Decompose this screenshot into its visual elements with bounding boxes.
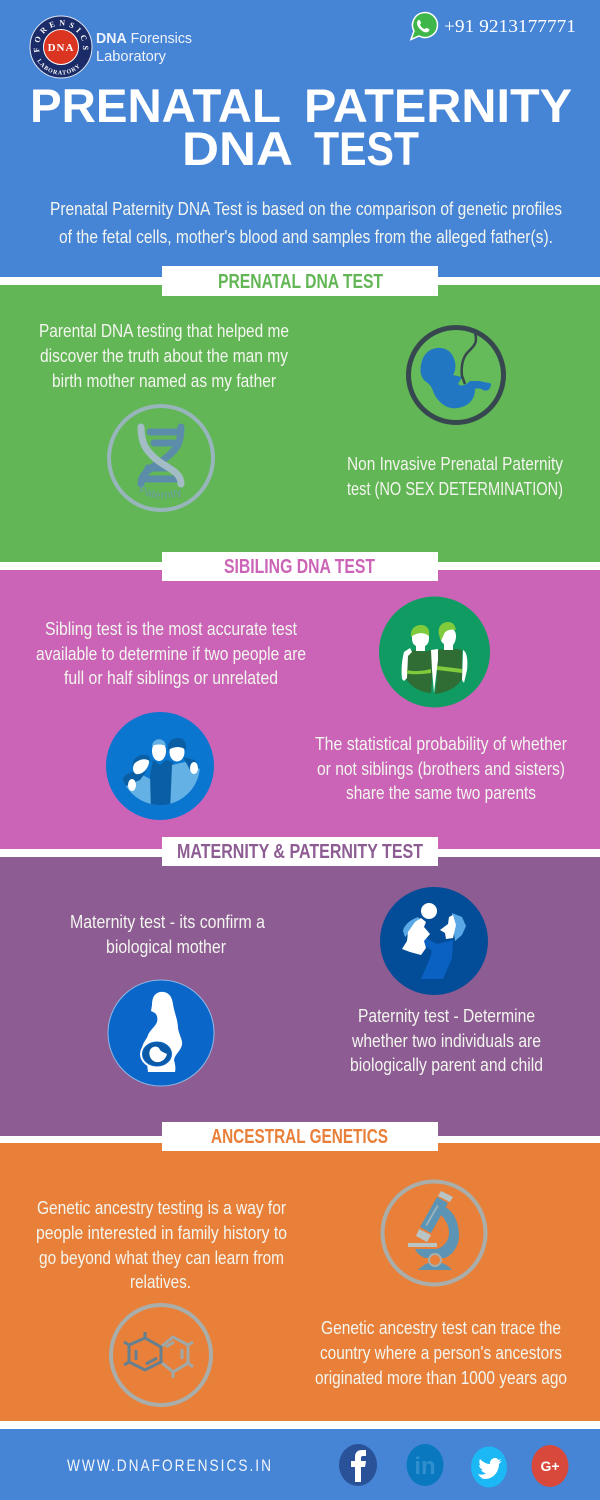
website: WWW.DNAFORENSICS.IN bbox=[67, 1456, 273, 1475]
panel: header bbox=[0, 0, 600, 277]
icon: DNA paternity: Paternity bbox=[138, 486, 180, 498]
icon: whatsapp bbox=[411, 13, 437, 40]
text: genetic ancestry testing: go beyond what they can learn from bbox=[39, 1248, 284, 1268]
text: non invasive test: Non Invasive Prenatal Paternity bbox=[347, 454, 563, 474]
icon: linkedin: in bbox=[414, 1453, 436, 1480]
panel: ancestral genetics bbox=[0, 1122, 600, 1421]
text: statistical probability: or not siblings (brothers and sisters) bbox=[317, 759, 565, 779]
heading: ancestral genetics bbox=[162, 1122, 438, 1151]
panel: maternity and paternity test bbox=[0, 837, 600, 1136]
panel: sibling DNA test bbox=[0, 552, 600, 849]
text: genetic ancestry testing: Genetic ancestry testing is a way for bbox=[37, 1198, 286, 1218]
icon: facebook bbox=[339, 1444, 377, 1486]
icon: family bbox=[106, 712, 214, 820]
icon: laboratory logo: LABORATORY bbox=[37, 58, 80, 75]
logo text bbox=[96, 30, 192, 65]
title: TEST bbox=[314, 122, 419, 175]
title: PATERNITY bbox=[304, 79, 572, 132]
text: paternity test: biologically parent and child bbox=[350, 1055, 543, 1075]
text: genetic ancestry test: Genetic ancestry test can trace the bbox=[321, 1318, 561, 1338]
intro text bbox=[50, 199, 562, 247]
icon: siblings bbox=[379, 596, 490, 708]
text: statistical probability: share the same two parents bbox=[346, 783, 536, 803]
icon: twitter bbox=[471, 1446, 507, 1488]
heading: sibling DNA test bbox=[162, 552, 438, 581]
heading: maternity and paternity test: MATERNITY & PATERNITY TEST bbox=[177, 840, 423, 863]
title: PRENATAL bbox=[30, 79, 281, 132]
text: sibling test: full or half siblings or unrelated bbox=[64, 668, 278, 688]
logo text: Laboratory bbox=[96, 48, 166, 65]
icon: linkedin bbox=[406, 1444, 444, 1486]
text: statistical probability bbox=[315, 734, 567, 803]
heading: ancestral genetics: ANCESTRAL GENETICS bbox=[211, 1125, 388, 1148]
icon: laboratory logo bbox=[30, 16, 92, 78]
text: parental DNA testing: discover the truth about the man my bbox=[40, 346, 288, 366]
icon: laboratory logo: DNA bbox=[48, 42, 74, 54]
text: statistical probability: The statistical probability of whether bbox=[315, 734, 567, 754]
text: paternity test: whether two individuals are bbox=[351, 1031, 541, 1051]
text: parental DNA testing bbox=[39, 321, 289, 391]
text: paternity test bbox=[350, 1006, 543, 1075]
logo text: DNA Forensics bbox=[96, 30, 192, 47]
icon: father and child bbox=[380, 887, 488, 995]
text: non invasive test bbox=[347, 454, 563, 499]
icon: google plus bbox=[532, 1445, 568, 1487]
text: parental DNA testing: Parental DNA testing that helped me bbox=[39, 321, 289, 341]
text: genetic ancestry testing bbox=[36, 1198, 287, 1292]
text: maternity test: biological mother bbox=[106, 937, 226, 957]
text: sibling test: available to determine if two people are bbox=[36, 644, 306, 664]
text: parental DNA testing: birth mother named as my father bbox=[52, 371, 276, 391]
icon: google plus: G+ bbox=[540, 1458, 560, 1474]
title: DNA bbox=[182, 122, 293, 175]
icon: molecule bbox=[111, 1305, 211, 1405]
text: paternity test: Paternity test - Determine bbox=[358, 1006, 535, 1026]
text: genetic ancestry testing: relatives. bbox=[130, 1272, 191, 1292]
icon: laboratory logo: FORENSICS bbox=[34, 20, 88, 52]
heading: prenatal DNA test: PRENATAL DNA TEST bbox=[218, 270, 383, 293]
icon: microscope bbox=[382, 1182, 486, 1284]
panel: prenatal DNA test bbox=[0, 266, 600, 562]
panel: footer bbox=[0, 1429, 600, 1500]
text: maternity test: Maternity test - its confirm a bbox=[70, 912, 266, 932]
heading: sibling DNA test: SIBILING DNA TEST bbox=[224, 555, 375, 578]
icon: fetus bbox=[408, 328, 504, 422]
phone number: +91 9213177771 bbox=[444, 16, 576, 36]
icon: DNA paternity bbox=[107, 404, 215, 512]
heading: maternity and paternity test bbox=[162, 837, 438, 866]
text: genetic ancestry test: country where a person's ancestors bbox=[320, 1343, 562, 1363]
heading: prenatal DNA test bbox=[162, 266, 438, 296]
title bbox=[30, 79, 572, 175]
text: sibling test: Sibling test is the most accurate test bbox=[45, 619, 297, 639]
text: genetic ancestry testing: people interested in family history to bbox=[36, 1223, 287, 1243]
text: sibling test bbox=[36, 619, 306, 688]
icon: pregnant woman bbox=[108, 980, 214, 1086]
text: genetic ancestry test bbox=[315, 1318, 567, 1388]
text: maternity test bbox=[70, 912, 266, 957]
